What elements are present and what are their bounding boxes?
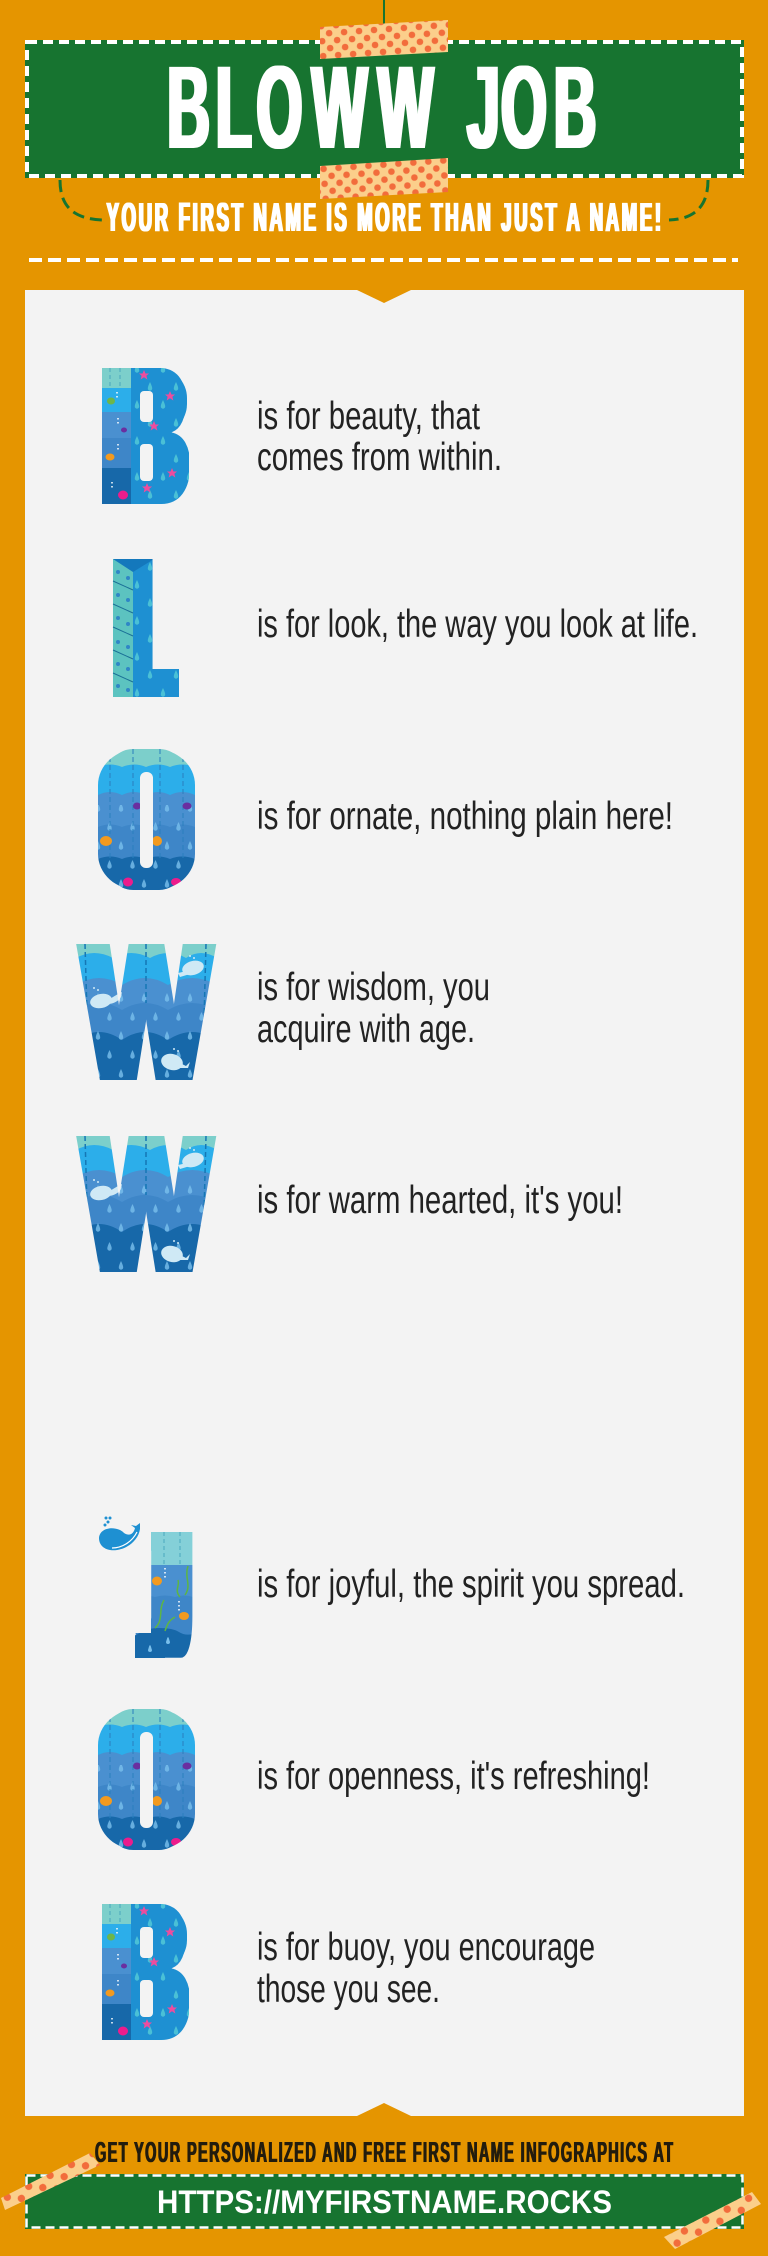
footer right tape [664,2192,761,2249]
panel: letter list [25,290,744,2116]
header banner [25,0,744,199]
top tape [320,20,448,59]
footer url box [25,2174,744,2229]
text: B second: those you see. [257,1968,440,2011]
footer left tape [1,2153,100,2210]
left dashed connector [60,180,103,220]
text: B [257,395,502,479]
text: B: comes from within. [257,436,502,479]
letter W second art [76,1136,217,1272]
letter O second art [98,1709,195,1850]
letter W art [76,944,217,1080]
text: W: acquire with age. [257,1008,475,1051]
title: BLOWW JOB [167,42,596,173]
footer url: HTTPS://MYFIRSTNAME.ROCKS [157,2184,612,2220]
text: B second: is for buoy, you encourage [257,1926,595,1969]
text: B: is for beauty, that [257,395,480,438]
hanging string [383,0,385,24]
bottom notch [357,2103,411,2116]
letter B second art [102,1904,189,2040]
green title box [25,40,744,178]
letter O art [98,749,195,890]
letter B art [102,368,189,504]
footer lead text: GET YOUR PERSONALIZED AND FREE FIRST NAME INFOGRAPHICS AT [95,2135,673,2168]
letter J art [135,1532,193,1658]
text: B second [257,1926,595,2011]
icon: whale [99,1518,140,1550]
subtitle: YOUR FIRST NAME IS MORE THAN JUST A NAME! [107,194,661,240]
right dashed connector [669,180,708,220]
text: W [257,966,490,1051]
text: W second: is for warm hearted, it's you! [257,1179,623,1222]
bottom tape [320,158,448,199]
top notch [357,290,411,303]
letter L art [113,559,179,697]
text: W: is for wisdom, you [257,966,490,1009]
